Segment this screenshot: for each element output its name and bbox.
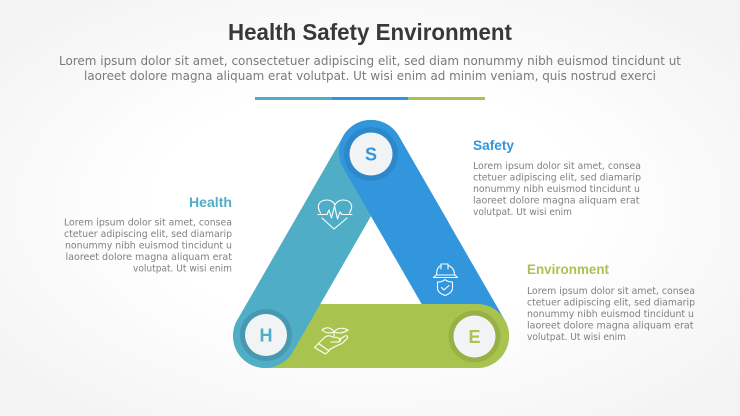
icon: hand holding plant: [314, 328, 348, 354]
health body text: volutpat. Ut wisi enim: [133, 264, 232, 274]
health body text: nonummy nibh euismod tincidunt u: [65, 240, 232, 252]
title: Health Safety Environment: [228, 19, 512, 45]
environment label: [527, 261, 695, 343]
environment body text: volutpat. Ut wisi enim: [527, 332, 626, 343]
health body text: Lorem ipsum dolor sit amet, consea: [64, 218, 232, 228]
health band: [265, 152, 371, 336]
safety heading: Safety: [473, 137, 514, 153]
node H: H: [260, 326, 272, 346]
node E: E: [468, 327, 481, 347]
tricolor divider: [255, 97, 485, 100]
environment body text: nonummy nibh euismod tincidunt u: [527, 309, 694, 320]
safety body text: volutpat. Ut wisi enim: [473, 207, 572, 218]
safety band top overlap: [371, 152, 420, 237]
health heading: Health: [189, 194, 232, 210]
safety body text: Lorem ipsum dolor sit amet, consea: [473, 161, 641, 172]
safety band: [371, 152, 477, 336]
environment band right overlap: [440, 304, 477, 368]
subtitle text: laoreet dolore magna aliquam erat volutpat. Ut wisi enim ad minim veniam, quis nostrud exerci: [84, 69, 656, 83]
safety body text: nonummy nibh euismod tincidunt u: [473, 184, 640, 195]
safety body text: laoreet dolore magna aliquam erat: [473, 196, 640, 206]
icon: safety helmet and shield: [434, 264, 458, 296]
node S: S: [365, 144, 377, 164]
environment heading: Environment: [527, 261, 609, 277]
health body text: ctetuer adipiscing elit, sed diamarip: [64, 229, 232, 240]
health label: [64, 194, 232, 274]
node H: [240, 309, 292, 361]
health body text: [64, 218, 232, 274]
node E: [448, 310, 500, 362]
health body text: laoreet dolore magna aliquam erat: [66, 252, 232, 263]
icon: heart with pulse: [318, 200, 352, 229]
subtitle text: [59, 54, 681, 83]
environment body text: laoreet dolore magna aliquam erat: [527, 320, 694, 332]
safety label: [473, 137, 641, 218]
node S: [344, 127, 398, 181]
triangle diagram: [240, 127, 500, 362]
environment body text: ctetuer adipiscing elit, sed diamarip: [527, 298, 695, 308]
subtitle text: Lorem ipsum dolor sit amet, consectetuer adipiscing elit, sed diam nonummy nibh euismod tincidunt ut: [59, 54, 681, 68]
safety body text: [473, 161, 641, 218]
environment body text: Lorem ipsum dolor sit amet, consea: [527, 286, 695, 297]
environment body text: [527, 286, 695, 343]
environment band: [265, 304, 477, 368]
safety body text: ctetuer adipiscing elit, sed diamarip: [473, 172, 641, 184]
